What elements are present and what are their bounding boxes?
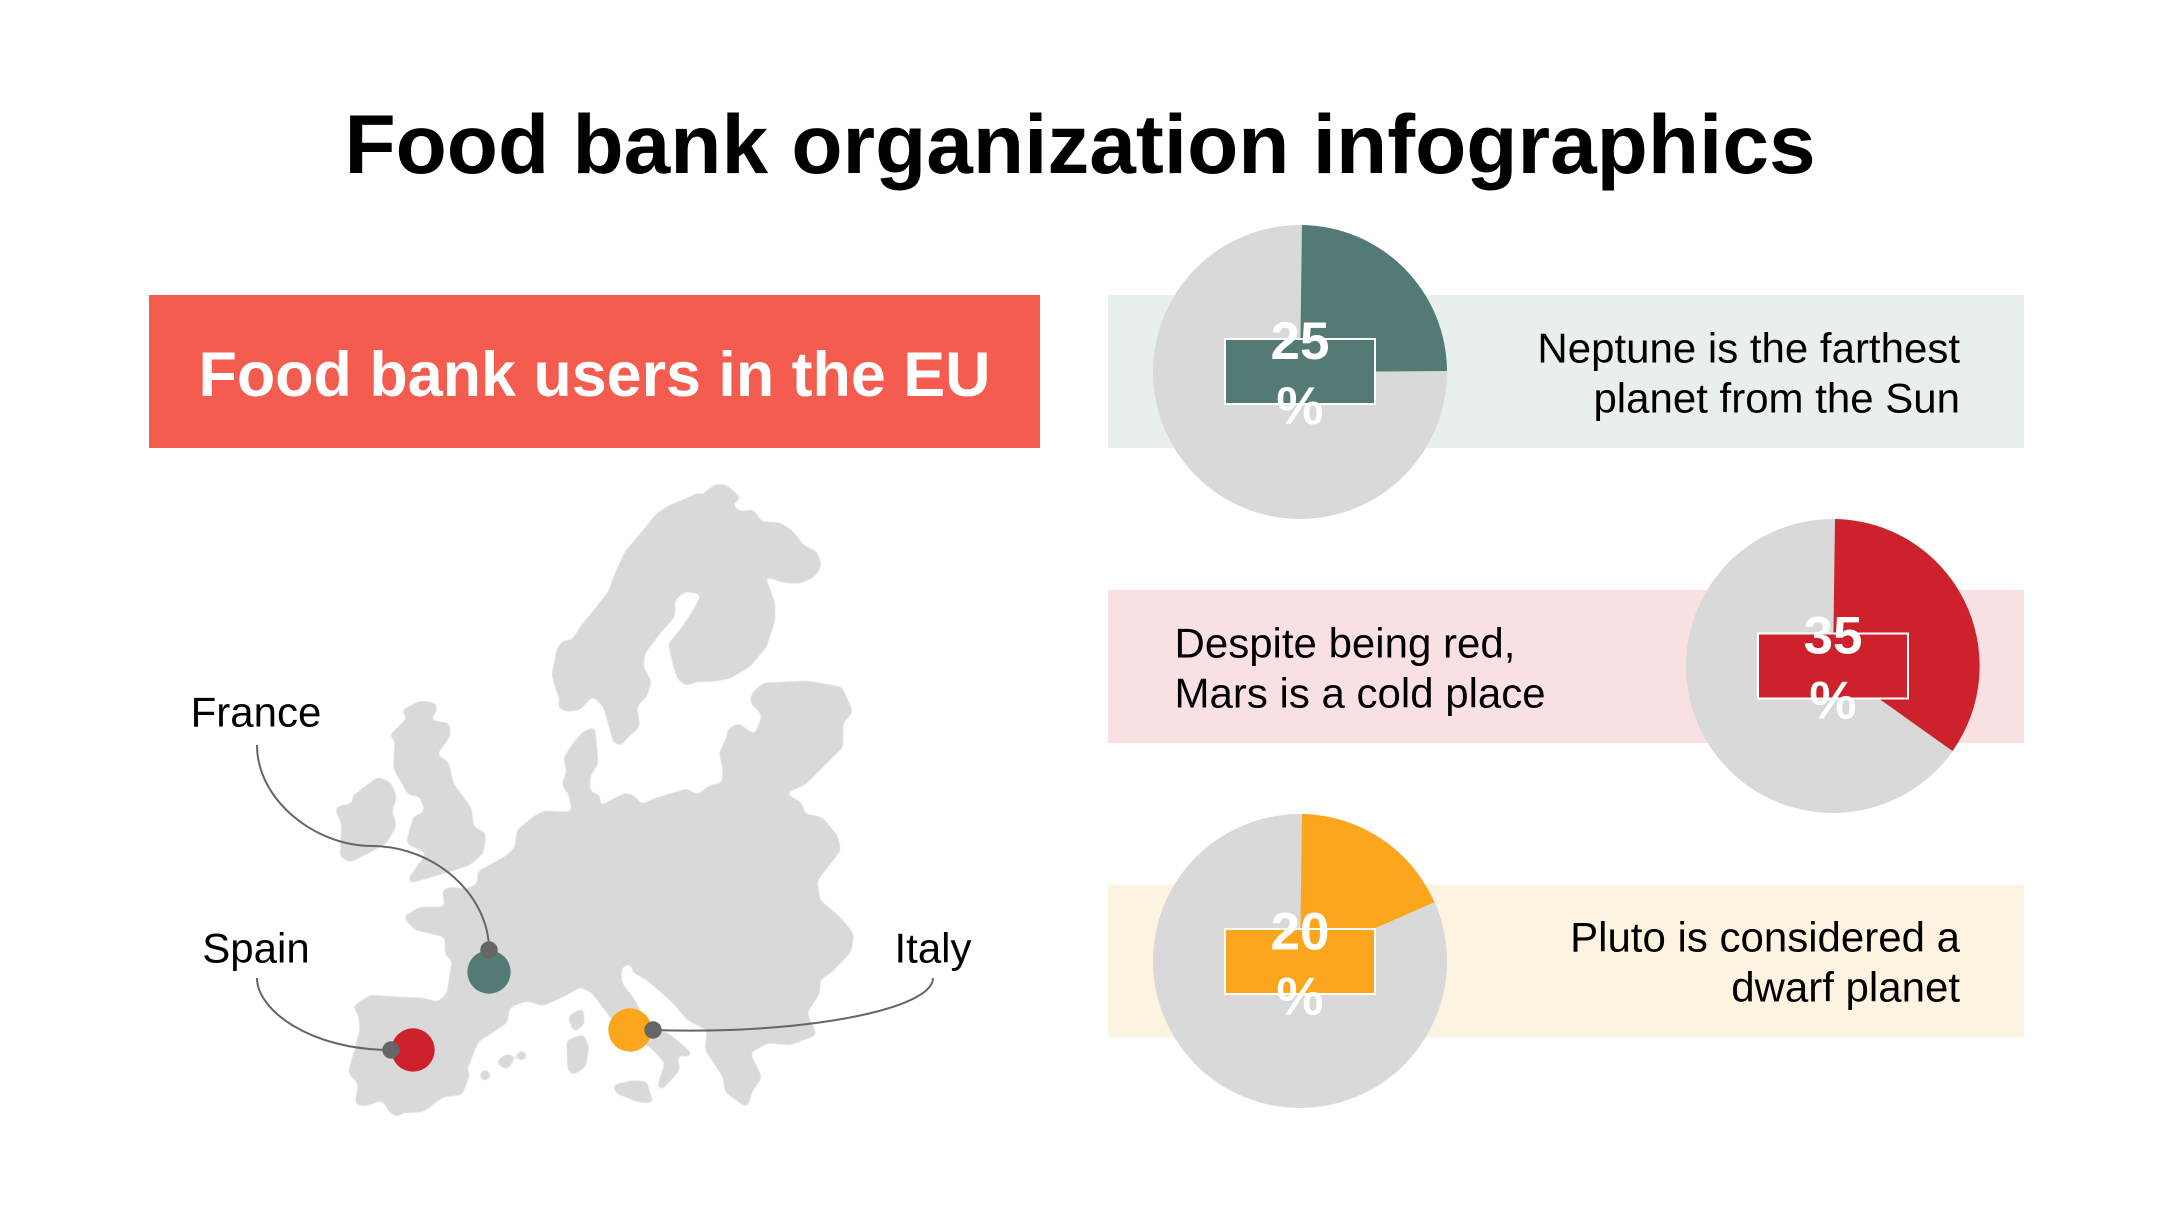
- title: Food bank organization infographics: [344, 97, 1816, 191]
- pie: 35%: [1686, 519, 1980, 813]
- marker: France: [467, 950, 511, 994]
- panel: Neptune: [1108, 225, 2024, 519]
- band: Neptune: [1108, 295, 2024, 448]
- panel: food bank users heading: [149, 295, 1040, 448]
- label: Italy: Italy: [894, 924, 972, 972]
- pie: 20%: [1153, 814, 1447, 1108]
- map: mainland Europe: [348, 681, 854, 1117]
- text: Pluto: Pluto is considered a: [1570, 914, 1961, 960]
- map: Denmark: [562, 727, 600, 813]
- label: France: France: [191, 688, 321, 736]
- panel: Mars: [1108, 519, 2024, 813]
- text: Neptune: Neptune is the farthest: [1537, 324, 1960, 372]
- map: Mediterranean islands: [479, 1007, 656, 1103]
- pie: 35%: %: [1809, 672, 1857, 730]
- pie: 25%: [1153, 225, 1447, 519]
- label: Spain: Spain: [202, 924, 310, 972]
- map: Scandinavia and Finland: [552, 484, 822, 747]
- connector: France: [257, 745, 498, 959]
- pie: 35%: 35: [1804, 606, 1862, 666]
- panel: Pluto: [1108, 814, 2024, 1108]
- map: Great Britain: [388, 701, 486, 883]
- panel: food bank users heading: Food bank users in the EU: [198, 340, 991, 410]
- connector: Italy: [644, 978, 933, 1039]
- band: Mars: [1108, 590, 2024, 743]
- text: Pluto: dwarf planet: [1731, 964, 1960, 1010]
- map: Ireland: [336, 777, 397, 863]
- pie: 20%: 20: [1271, 902, 1329, 962]
- band: Pluto: [1108, 884, 2024, 1038]
- pie: 20%: %: [1276, 968, 1324, 1026]
- connector: Spain: [257, 978, 400, 1059]
- map: Europe: [336, 484, 854, 1117]
- pie: 25%: %: [1276, 377, 1324, 436]
- marker: Italy: [608, 1008, 652, 1052]
- pie: 25%: 25: [1271, 312, 1329, 371]
- text: Mars: Despite being red,: [1174, 620, 1515, 666]
- text: Mars: Mars is a cold place: [1174, 670, 1546, 716]
- marker: Spain: [391, 1028, 435, 1072]
- text: Neptune: planet from the Sun: [1593, 374, 1960, 422]
